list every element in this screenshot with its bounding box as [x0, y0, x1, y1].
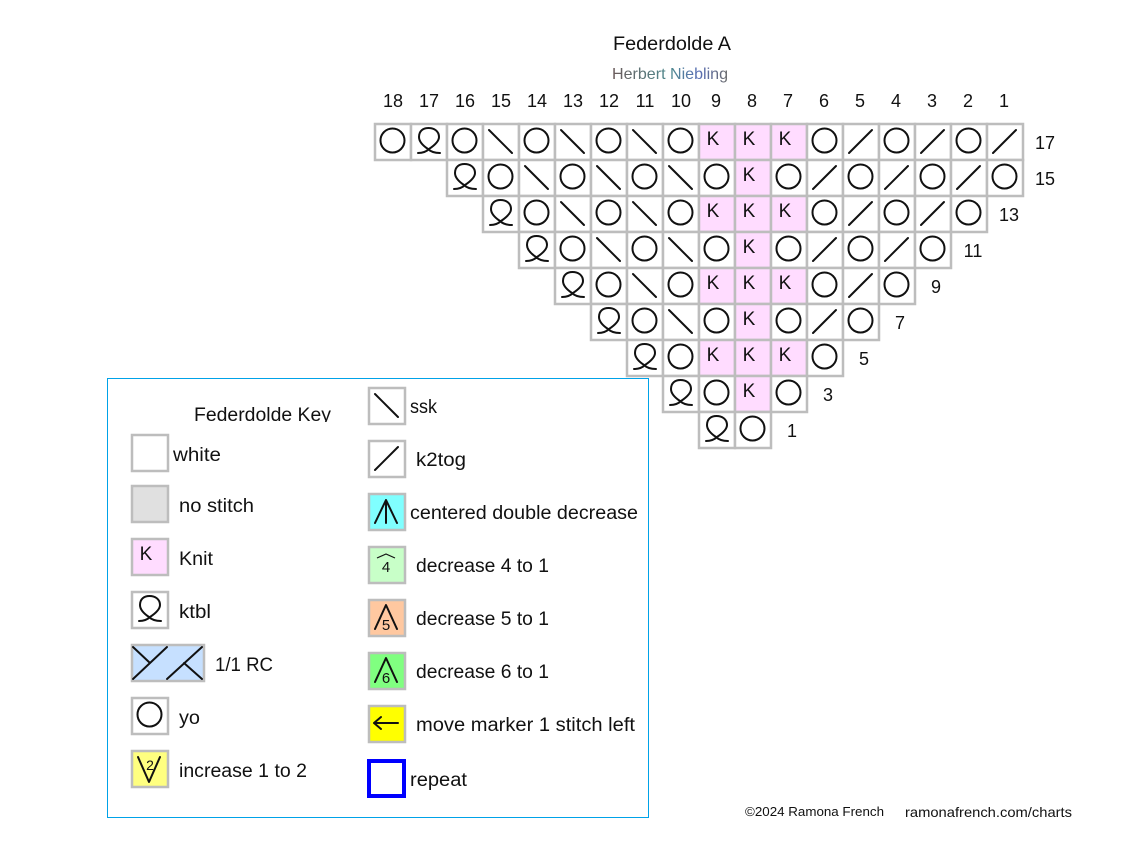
chart row 13: K — [743, 201, 756, 222]
key: decrease 4 to 1: 4 — [382, 559, 390, 576]
chart row 13: K — [779, 201, 792, 222]
chart row 7 — [591, 304, 905, 340]
key: knit — [132, 539, 214, 575]
chart row 9: K — [707, 273, 720, 294]
key: increase 1 to 2: increase 1 to 2 — [179, 761, 307, 782]
chart row 17 — [375, 124, 1055, 160]
key: move marker 1 stitch left: move marker 1 stitch left — [416, 715, 636, 736]
key: no stitch — [132, 486, 254, 522]
key: decrease 6 to 1: decrease 6 to 1 — [416, 662, 549, 683]
column numbers: 8 — [747, 91, 757, 111]
column numbers — [383, 91, 1009, 111]
chart row 11: K — [743, 237, 756, 258]
key: ssk: ssk — [410, 397, 437, 418]
chart row 5 — [627, 340, 869, 376]
column numbers: 2 — [963, 91, 973, 111]
column numbers: 15 — [491, 91, 511, 111]
chart row 5: K — [707, 345, 720, 366]
key: yo: yo — [179, 708, 200, 729]
key: no stitch: no stitch — [179, 496, 254, 517]
chart row 13: K — [707, 201, 720, 222]
chart row 9 — [555, 268, 941, 304]
chart row 5: K — [743, 345, 756, 366]
website: ramonafrench.com/charts — [905, 804, 1072, 820]
key: 1/1 RC: 1/1 RC — [215, 655, 273, 676]
chart row 9: K — [779, 273, 792, 294]
key: knit: Knit — [179, 549, 214, 570]
column numbers: 5 — [855, 91, 865, 111]
chart row 3: 3 — [823, 385, 833, 405]
chart row 15: K — [743, 165, 756, 186]
column numbers: 11 — [636, 91, 654, 111]
column numbers: 1 — [999, 91, 1009, 111]
column numbers: 6 — [819, 91, 829, 111]
key: repeat — [369, 761, 468, 796]
column numbers: 10 — [671, 91, 691, 111]
chart row 1: 1 — [787, 421, 797, 441]
designer credit: Herbert Niebling — [612, 66, 728, 83]
chart row 11: 11 — [964, 241, 982, 261]
key: ktbl: ktbl — [179, 602, 211, 623]
column numbers: 18 — [383, 91, 403, 111]
key: k2tog: k2tog — [416, 450, 466, 471]
key: increase 1 to 2 — [132, 751, 307, 787]
key: repeat: repeat — [410, 770, 468, 791]
key: decrease 5 to 1: decrease 5 to 1 — [416, 609, 549, 630]
chart row 3 — [663, 376, 833, 412]
key: 1/1 RC — [132, 645, 273, 681]
column numbers: 17 — [419, 91, 439, 111]
column numbers: 7 — [783, 91, 793, 111]
chart row 7: 7 — [895, 313, 905, 333]
key: ktbl — [132, 592, 211, 628]
title: Federdolde A — [613, 34, 731, 55]
key: decrease 5 to 1 — [369, 600, 549, 636]
key: knit: K — [140, 544, 153, 565]
chart row 13 — [483, 196, 1019, 232]
chart row 7: K — [743, 309, 756, 330]
chart row 11 — [519, 232, 982, 268]
chart: lace grid — [375, 124, 1055, 448]
key: centered double decrease: centered double decrease — [410, 503, 638, 524]
panel: key — [108, 378, 648, 818]
column numbers: 3 — [927, 91, 937, 111]
key: white: white — [172, 445, 221, 466]
chart row 15: 15 — [1035, 169, 1055, 189]
chart row 1 — [699, 412, 797, 448]
chart row 5: 5 — [859, 349, 869, 369]
key: ssk — [369, 388, 437, 424]
column numbers: 16 — [455, 91, 475, 111]
key: k2tog — [369, 441, 466, 477]
column numbers: 14 — [527, 91, 547, 111]
key: decrease 6 to 1: 6 — [382, 670, 390, 687]
key: move marker 1 stitch left — [369, 706, 636, 742]
chart row 15 — [447, 160, 1055, 196]
key: yo — [132, 698, 200, 734]
key: decrease 4 to 1 — [369, 547, 549, 583]
chart row 17: K — [779, 129, 792, 150]
key: decrease 6 to 1 — [369, 653, 549, 689]
chart row 17: K — [743, 129, 756, 150]
column numbers: 9 — [711, 91, 721, 111]
chart row 5: K — [779, 345, 792, 366]
column numbers: 4 — [891, 91, 901, 111]
chart row 17: K — [707, 129, 720, 150]
key: decrease 4 to 1: decrease 4 to 1 — [416, 556, 549, 577]
key: decrease 5 to 1: 5 — [382, 617, 390, 634]
chart row 9: 9 — [931, 277, 941, 297]
key border — [108, 378, 648, 818]
column numbers: 12 — [599, 91, 619, 111]
chart row 9: K — [743, 273, 756, 294]
key: white — [132, 435, 221, 471]
key heading: Federdolde Key — [194, 405, 331, 426]
chart row 13: 13 — [999, 205, 1019, 225]
key: increase 1 to 2: 2 — [146, 757, 154, 773]
chart row 17: 17 — [1035, 133, 1055, 153]
chart row 3: K — [743, 381, 756, 402]
column numbers: 13 — [563, 91, 583, 111]
copyright: ©2024 Ramona French — [745, 804, 884, 819]
key: centered double decrease — [369, 494, 638, 530]
